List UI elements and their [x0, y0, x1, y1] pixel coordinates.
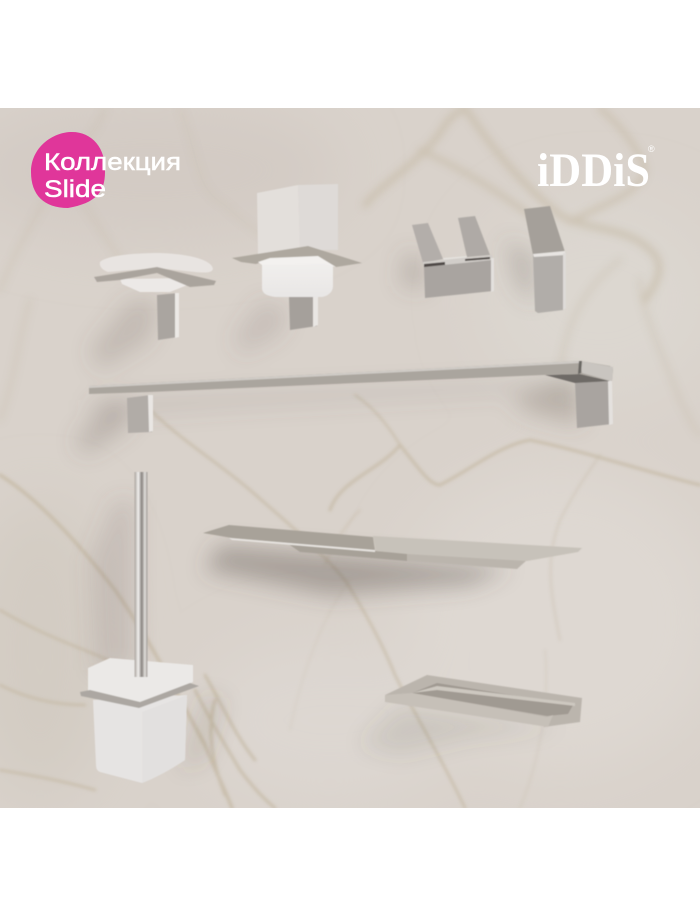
product: tumbler holder [232, 184, 362, 330]
hook arm [524, 206, 565, 255]
frosted glass upper [88, 658, 193, 704]
lower left fold [287, 543, 407, 561]
product: paper holder [385, 675, 582, 727]
lower right fold [407, 553, 527, 569]
frosted glass lower [262, 262, 333, 297]
hook body [533, 252, 566, 313]
left sheet [203, 525, 375, 551]
product: double hook [412, 216, 494, 298]
right bracket [575, 381, 612, 428]
product: metal shelf [203, 525, 582, 569]
frosted glass upper [257, 185, 300, 255]
metal plate [232, 246, 362, 267]
brush handle [134, 472, 148, 677]
logo: IDDIS: iDDiS [537, 144, 650, 197]
wall shadows cast by accessories [75, 240, 580, 670]
right prong [458, 216, 490, 257]
wall bracket [157, 293, 178, 340]
hook base [423, 255, 493, 268]
metal plate [94, 267, 216, 287]
collection title: Slide [44, 176, 106, 203]
left prong [412, 223, 443, 263]
product: toilet brush holder [80, 472, 199, 783]
front rod [385, 693, 553, 727]
right sheet [373, 536, 582, 561]
frosted glass lower [93, 695, 187, 783]
product: single hook [524, 206, 566, 313]
product: soap dish [94, 253, 216, 340]
wall bracket [289, 296, 317, 330]
ceramic dish [100, 253, 213, 273]
collection title: Коллекция [44, 149, 181, 176]
product: towel bar [89, 361, 613, 433]
holder frame [385, 675, 582, 727]
badge: collection name [31, 132, 181, 208]
marble wall photo [0, 100, 700, 808]
bar [89, 361, 613, 394]
left bracket [127, 395, 152, 433]
metal rim [80, 683, 199, 708]
inner opening [412, 683, 573, 716]
pink blob [31, 132, 105, 208]
lower bowl [120, 278, 190, 292]
infographic: product photo on white page [0, 108, 700, 808]
registered mark: ® [648, 144, 655, 154]
